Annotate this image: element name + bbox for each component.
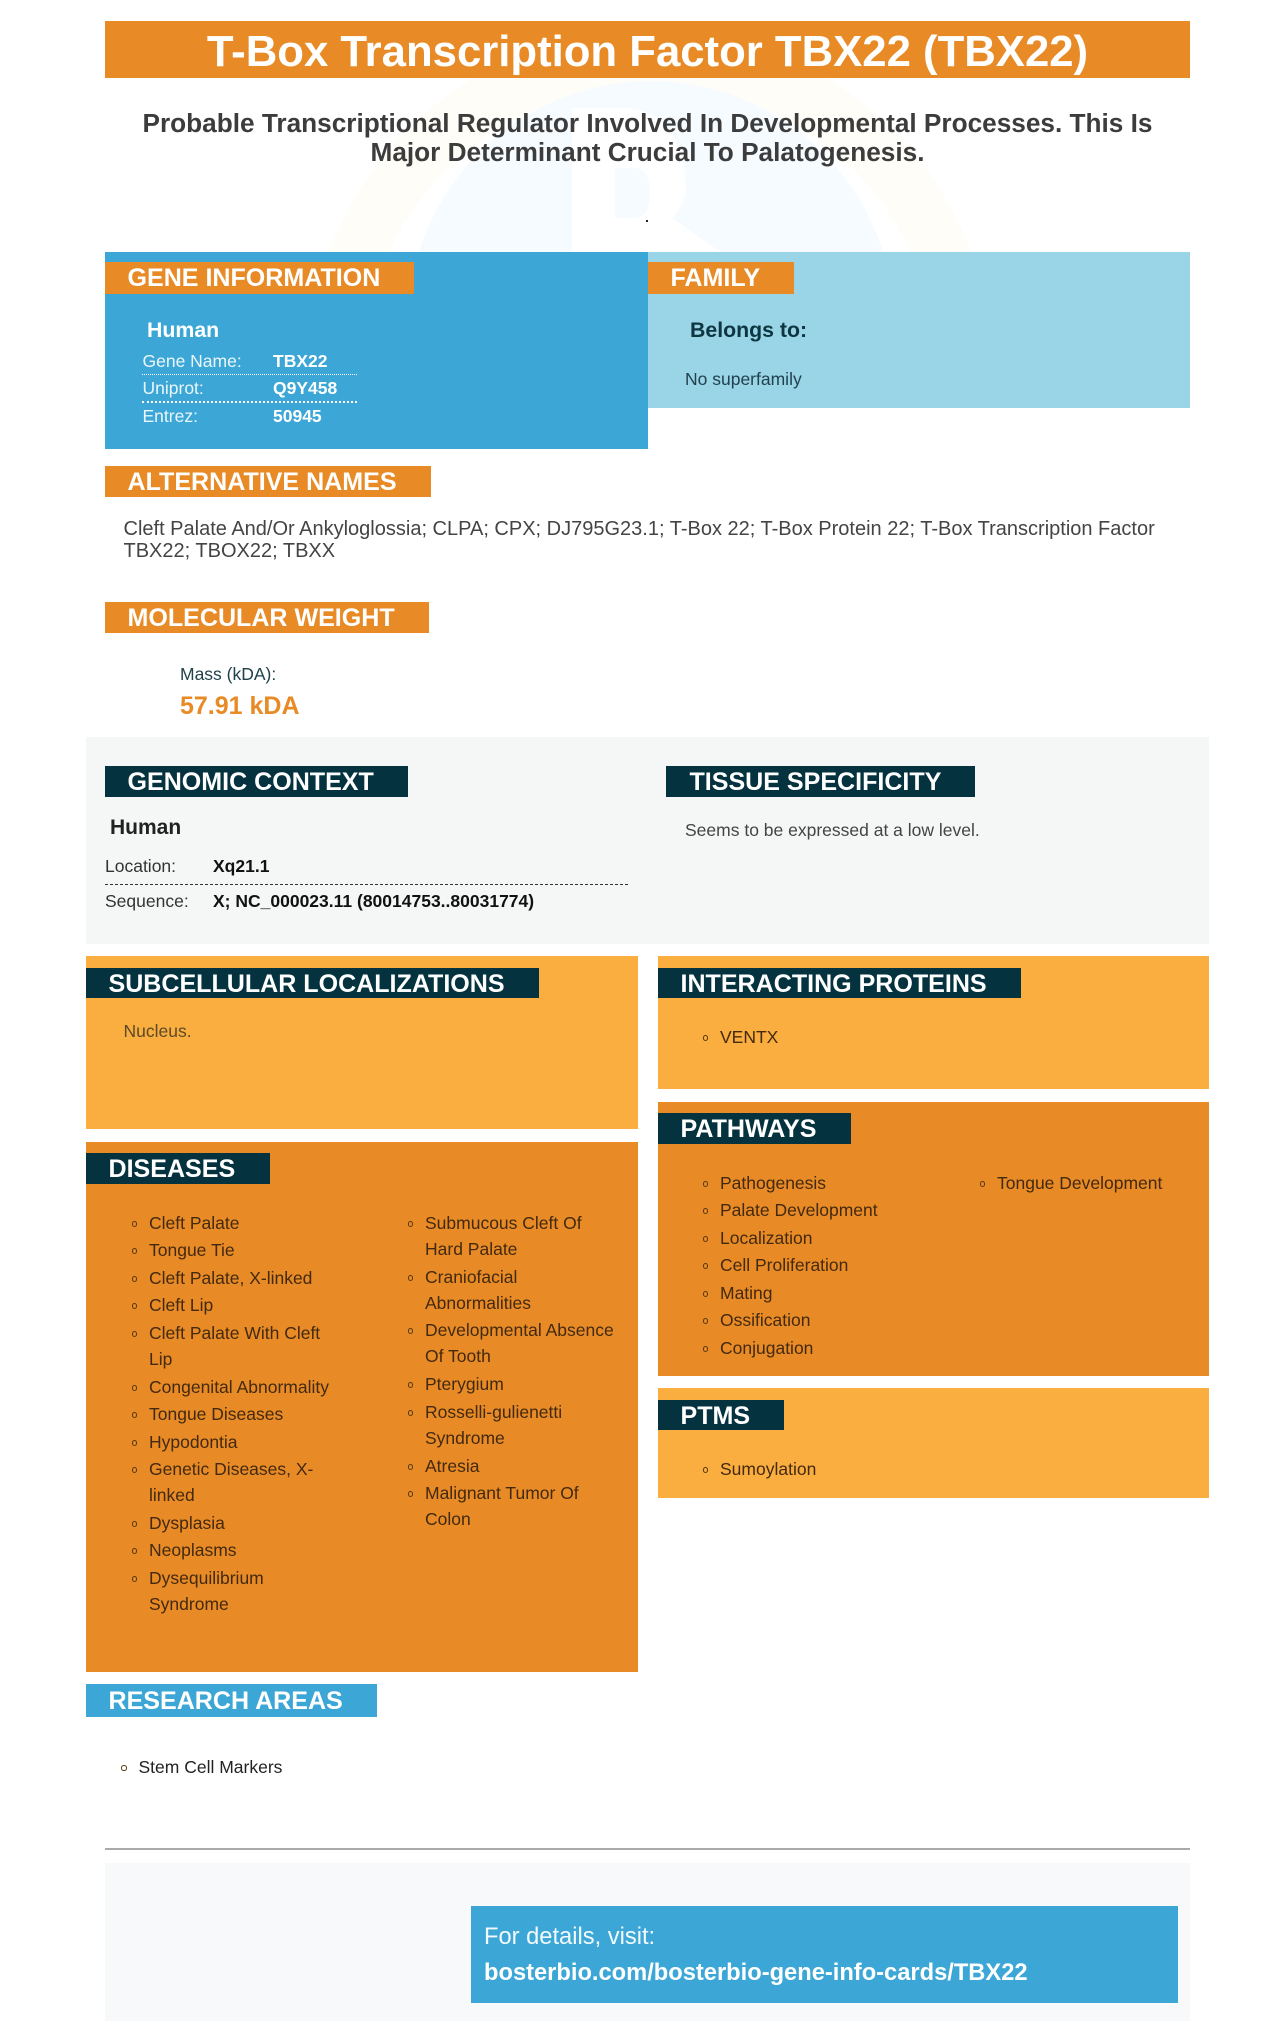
heading: genomic context: GENOMIC CONTEXT	[128, 768, 374, 796]
heading: family: FAMILY	[670, 264, 760, 292]
pathways list	[703, 1173, 1162, 1358]
panel: family	[648, 252, 1190, 408]
interacting proteins list: VENTX	[720, 1027, 778, 1047]
heading: molecular weight: MOLECULAR WEIGHT	[128, 604, 395, 632]
panel: genomic context and tissue specificity: X; NC_000023.11 (80014753..80031774)	[213, 891, 534, 911]
diseases list column 1: Syndrome	[149, 1594, 229, 1614]
pathways list: Conjugation	[720, 1338, 813, 1358]
heading: subcellular localizations: SUBCELLULAR LOCALIZATIONS	[108, 970, 505, 998]
belongs to label: Belongs to:	[690, 318, 807, 342]
diseases list column 2: Submucous Cleft Of	[425, 1213, 582, 1233]
family text: No superfamily	[685, 369, 802, 389]
alternative names text: Cleft Palate And/Or Ankyloglossia; CLPA; CPX; DJ795G23.1; T-Box 22; T-Box Protein 22; T-Box Transcription Factor TBX22; TBOX22; TBXX	[124, 518, 1155, 562]
diseases list column 2: Of Tooth	[425, 1346, 491, 1366]
ptms list: Sumoylation	[720, 1459, 816, 1479]
callout label: For details, visit:	[484, 1924, 655, 1950]
pathways list: Pathogenesis	[720, 1173, 826, 1193]
mass value: 57.91 kDA	[180, 692, 300, 720]
title: T-Box Transcription Factor TBX22 (TBX22)	[207, 27, 1088, 76]
panel: gene information	[105, 252, 648, 449]
diseases list column 1: Cleft Lip	[149, 1295, 213, 1315]
entrez row: Entrez:	[142, 406, 198, 426]
heading: diseases	[86, 1153, 270, 1184]
panel: footer	[105, 1863, 1190, 2021]
diseases list column 2: Colon	[425, 1509, 471, 1529]
diseases list column 1: Tongue Diseases	[149, 1404, 283, 1424]
heading: ptms	[658, 1400, 784, 1430]
diseases list column 1: Lip	[149, 1349, 172, 1369]
diseases list column 2: Abnormalities	[425, 1293, 531, 1313]
panel: diseases	[86, 1142, 638, 1672]
subtitle: Probable Transcriptional Regulator Involved In Developmental Processes. This Is	[142, 108, 1152, 138]
panel: gene information: TBX22	[273, 351, 327, 371]
background watermark logo	[419, 81, 883, 252]
heading: pathways: PATHWAYS	[680, 1115, 816, 1143]
mass label: Mass (kDA):	[180, 664, 276, 684]
panel: pathways	[658, 1102, 1209, 1376]
panel: genomic context and tissue specificity: Xq21.1	[213, 856, 269, 876]
panel: gene information: 50945	[273, 406, 322, 426]
heading: research areas: RESEARCH AREAS	[108, 1687, 343, 1715]
diseases list column 1: Neoplasms	[149, 1540, 237, 1560]
heading: pathways	[658, 1113, 851, 1144]
gene name row: Gene Name:	[142, 351, 242, 371]
title	[105, 21, 1190, 78]
panel: subcellular localizations	[86, 956, 638, 1129]
heading: tissue specificity: TISSUE SPECIFICITY	[690, 768, 941, 796]
panel: ptms	[658, 1388, 1209, 1498]
heading: interacting proteins: INTERACTING PROTEINS	[680, 970, 987, 998]
panel: interacting proteins	[658, 956, 1209, 1089]
diseases list column 1: linked	[149, 1485, 195, 1505]
diseases list column 2: Hard Palate	[425, 1239, 517, 1259]
callout url: bosterbio.com/bosterbio-gene-info-cards/TBX22	[484, 1960, 1028, 1986]
diseases list column 1	[132, 1213, 329, 1614]
diseases list column 1: Cleft Palate, X-linked	[149, 1268, 312, 1288]
localization text: Nucleus.	[124, 1021, 192, 1041]
diseases list column 1: Hypodontia	[149, 1432, 238, 1452]
subtitle	[142, 108, 1152, 167]
diseases list column 2: Malignant Tumor Of	[425, 1483, 579, 1503]
pathways list: Ossification	[720, 1310, 810, 1330]
heading: family	[648, 262, 794, 294]
pathways list: Mating	[720, 1283, 773, 1303]
diseases list column 1: Genetic Diseases, X-	[149, 1459, 313, 1479]
species label: Human	[147, 318, 219, 342]
pathways list: Palate Development	[720, 1200, 878, 1220]
heading: diseases: DISEASES	[108, 1155, 235, 1183]
diseases list column 1: Congenital Abnormality	[149, 1377, 329, 1397]
pathways list: Cell Proliferation	[720, 1255, 848, 1275]
diseases list column 1: Dysequilibrium	[149, 1568, 264, 1588]
diseases list column 2: Rosselli-gulienetti	[425, 1402, 562, 1422]
diseases list column 1: Dysplasia	[149, 1513, 225, 1533]
tissue specificity text: Seems to be expressed at a low level.	[685, 820, 980, 840]
diseases list column 1: Cleft Palate With Cleft	[149, 1323, 320, 1343]
footer divider	[105, 1848, 1190, 1850]
panel: genomic context and tissue specificity	[86, 737, 1209, 944]
diseases list column 2: Syndrome	[425, 1428, 505, 1448]
heading: research areas	[86, 1684, 377, 1717]
location row: Location:	[105, 856, 176, 876]
panel: gene information: Q9Y458	[273, 378, 337, 398]
diseases list column 2	[408, 1213, 614, 1529]
heading: gene information: GENE INFORMATION	[128, 264, 380, 292]
sequence row: Sequence:	[105, 891, 189, 911]
heading: ptms: PTMS	[680, 1402, 750, 1430]
diseases list column 2: Craniofacial	[425, 1267, 517, 1287]
species label: Human	[110, 816, 181, 839]
uniprot row: Uniprot:	[142, 378, 204, 398]
diseases list column 2: Developmental Absence	[425, 1320, 614, 1340]
diseases list column 2: Pterygium	[425, 1374, 504, 1394]
diseases list column 1: Cleft Palate	[149, 1213, 239, 1233]
diseases list column 1: Tongue Tie	[149, 1240, 235, 1260]
callout: details link	[471, 1906, 1178, 2003]
subtitle: Major Determinant Crucial To Palatogenesis.	[371, 137, 924, 167]
pathways list: Localization	[720, 1228, 812, 1248]
dot	[646, 220, 648, 222]
research areas list: Stem Cell Markers	[138, 1757, 282, 1777]
heading: alternative names: ALTERNATIVE NAMES	[128, 468, 397, 496]
pathways list: Tongue Development	[997, 1173, 1162, 1193]
diseases list column 2: Atresia	[425, 1456, 479, 1476]
